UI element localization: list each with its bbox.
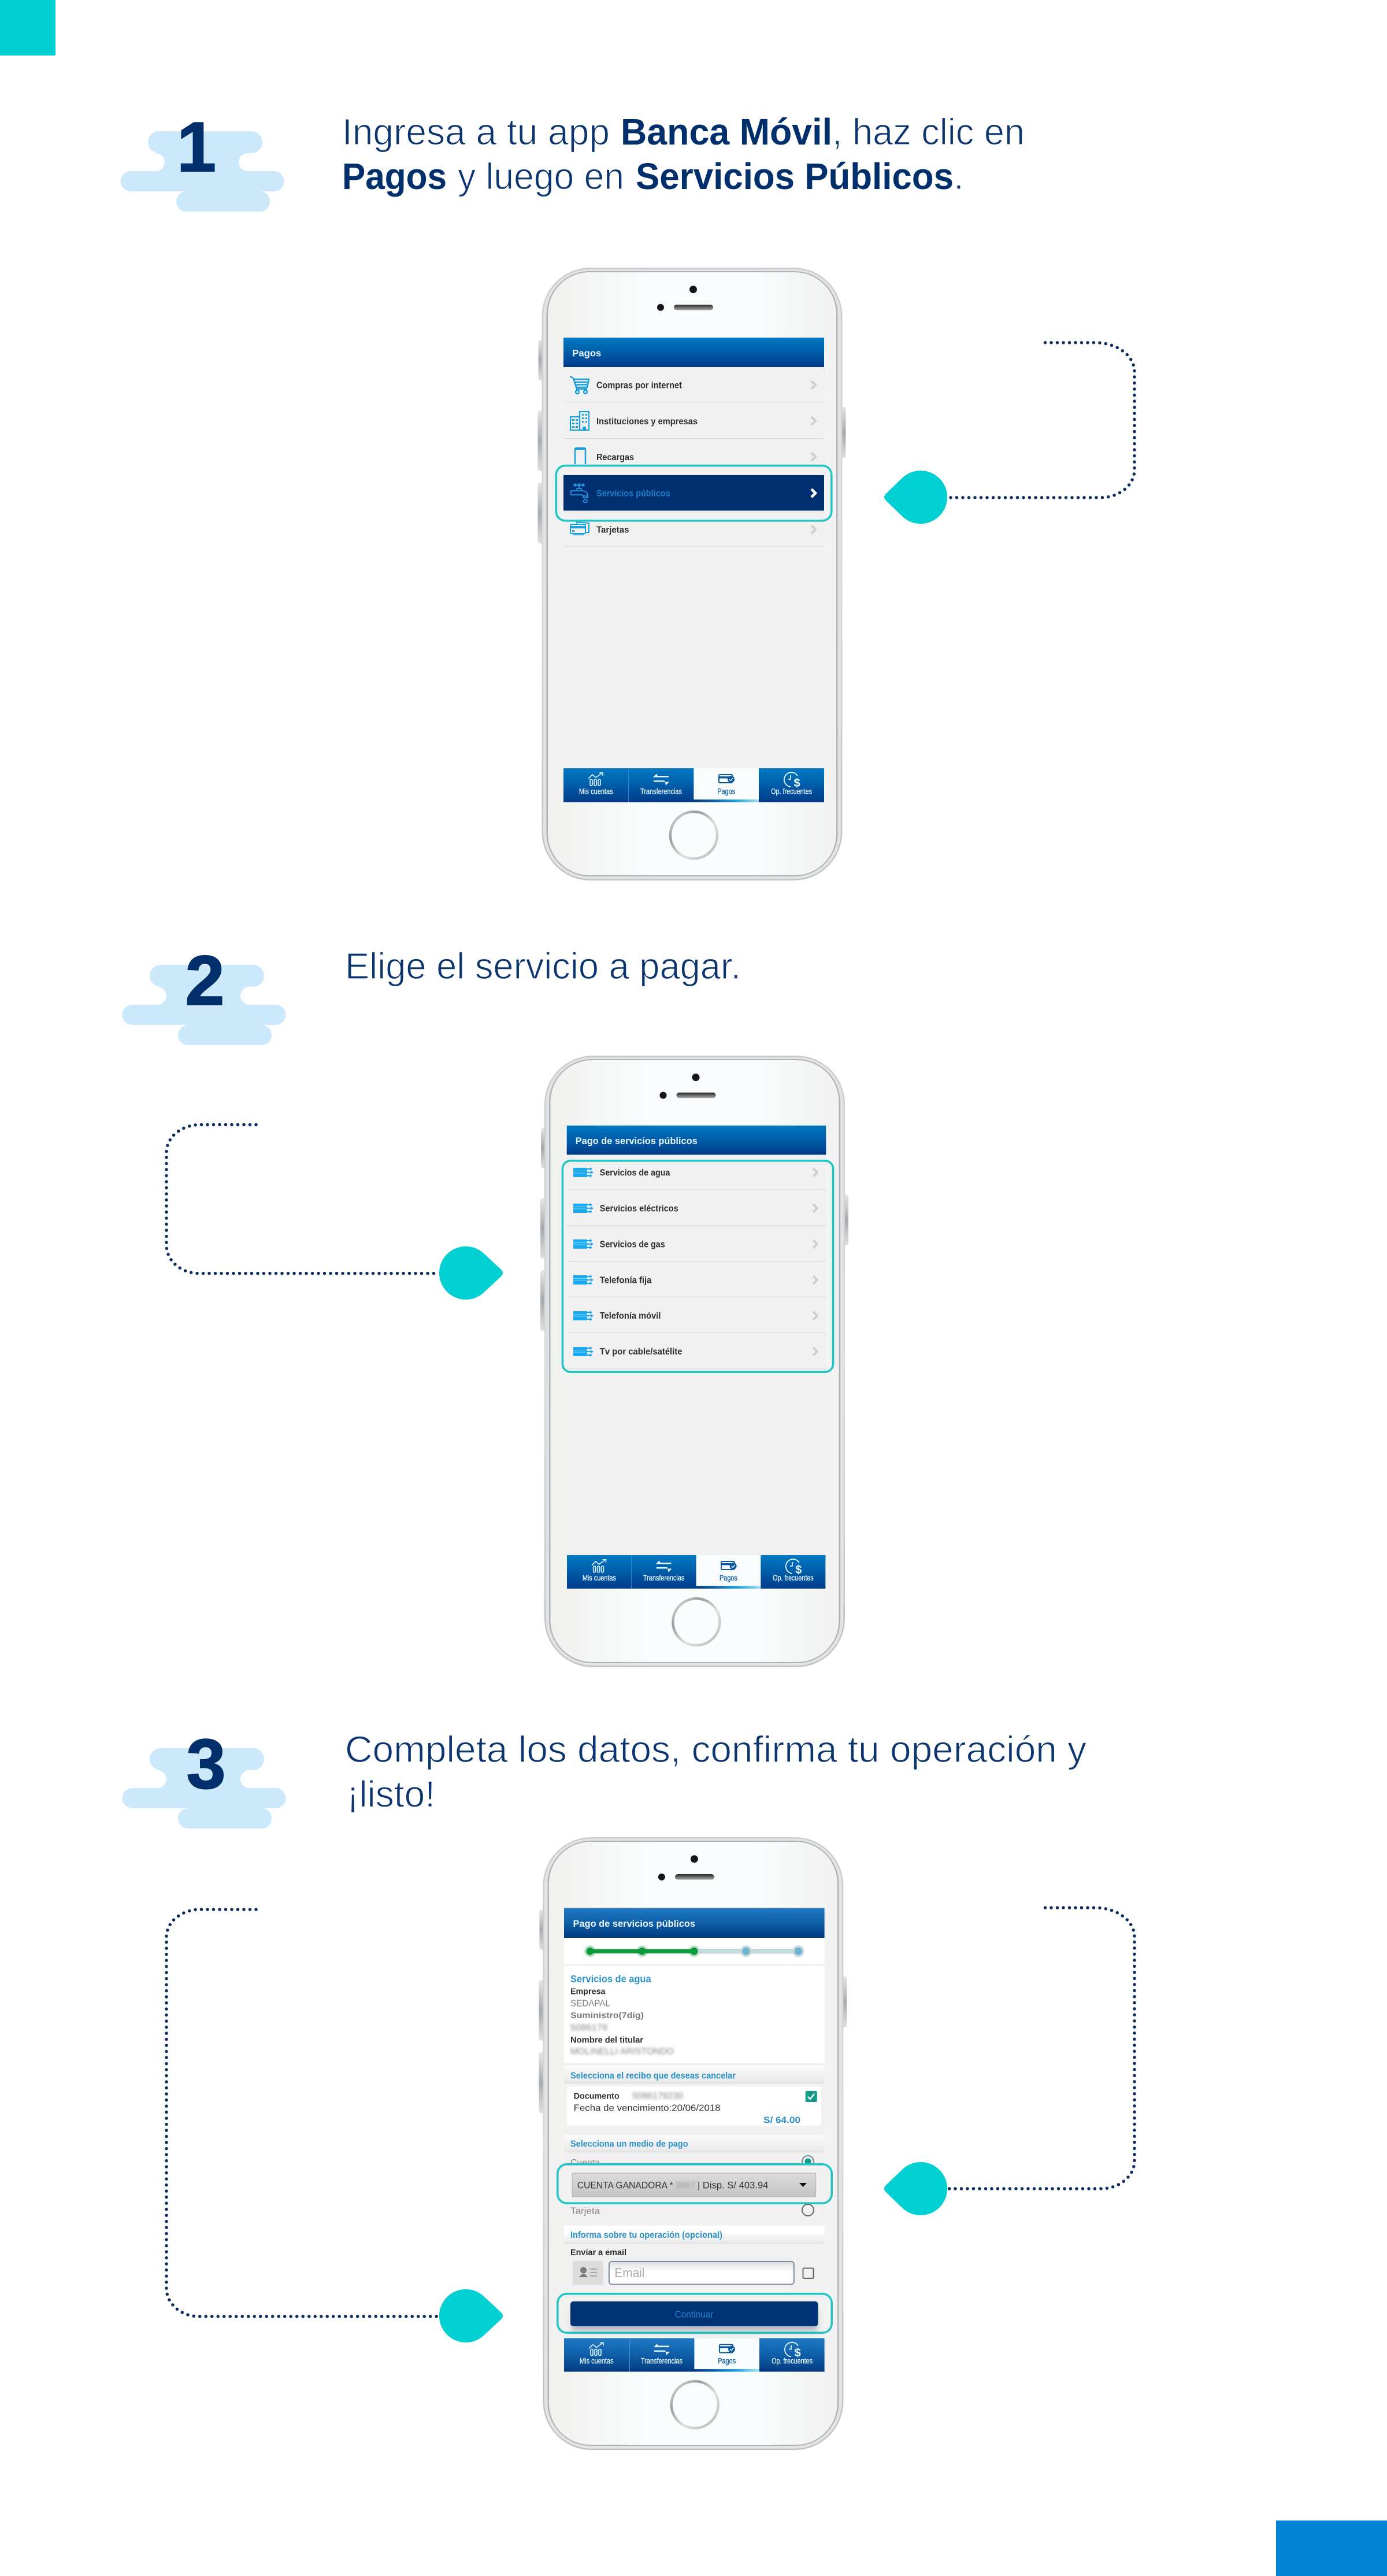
row: recargas <box>575 448 815 467</box>
bottom tab bar: Transferencias <box>640 787 682 795</box>
option: tarjeta: Tarjeta <box>570 2206 600 2216</box>
bottom tab bar: $ <box>795 1564 802 1576</box>
step 1 instruction text: Banca Móvil <box>621 111 832 153</box>
section: recibo: Selecciona el recibo que deseas cancelar <box>570 2071 736 2081</box>
bottom tab bar: Op. frecuentes <box>771 787 812 795</box>
section: informa <box>564 2226 825 2243</box>
account dropdown: | Disp. S/ 403.94 <box>698 2179 768 2191</box>
receipt card: 5086179230 <box>632 2092 683 2101</box>
service details: MOLINELLI ARISTONDO <box>570 2046 674 2057</box>
screen header <box>564 1908 825 1938</box>
receipt card: Fecha de vencimiento:20/06/2018 <box>574 2103 721 2114</box>
bottom tab bar: Mis cuentas <box>580 2357 614 2366</box>
screen header: Pago de servicios públicos <box>573 1918 695 1929</box>
cover between rows <box>563 464 824 521</box>
email field <box>570 2248 814 2285</box>
service details: Empresa <box>570 1986 606 1997</box>
row: compras por internet: Compras por internet <box>596 380 682 391</box>
row: servicios de agua <box>567 1167 826 1190</box>
service details: SEDAPAL <box>570 1999 610 2008</box>
row: recargas: Recargas <box>596 453 634 462</box>
step 3 instruction text <box>345 1729 1086 1815</box>
number badge 3 <box>123 1724 285 1829</box>
step 1 instruction text: , haz clic en <box>832 111 1025 153</box>
number badge 2: 2 <box>186 941 224 1020</box>
corner block: teal <box>0 0 55 55</box>
bottom tab bar: Transferencias <box>643 1574 685 1582</box>
row: servicios de agua: Servicios de agua <box>600 1168 670 1178</box>
row: telefonía móvil <box>567 1311 826 1333</box>
option: cuenta: Cuenta <box>570 2158 600 2168</box>
row: servicios públicos selected <box>563 475 824 511</box>
phone 2: service list <box>540 1056 848 1667</box>
row: tv por cable: Tv por cable/satélite <box>600 1347 683 1357</box>
step 1 instruction text <box>342 111 1025 197</box>
number badge 1 <box>120 108 284 212</box>
phone 3: payment form <box>539 1837 847 2450</box>
bottom tab bar: Mis cuentas <box>579 787 613 795</box>
step 1 instruction text: . <box>954 156 964 197</box>
email field: Enviar a email <box>570 2248 626 2257</box>
row: servicios de gas: Servicios de gas <box>600 1239 665 1250</box>
step 1 instruction text: y luego en <box>458 156 624 197</box>
continue button <box>570 2301 818 2331</box>
number badge 3: 3 <box>187 1724 225 1803</box>
step 3 instruction text: ¡listo! <box>347 1774 435 1815</box>
bottom tab bar: $ <box>794 2347 801 2360</box>
step 1 instruction text: Pagos <box>342 156 447 197</box>
service details: Nombre del titular <box>570 2035 643 2045</box>
bottom tab bar <box>564 2338 825 2372</box>
cover below cuenta <box>558 2164 830 2203</box>
receipt card <box>568 2086 821 2126</box>
row: telefonía fija: Telefonía fija <box>600 1275 652 1285</box>
connector with pin 3 left <box>166 1909 503 2342</box>
screen header: Pagos: Pagos <box>572 348 601 358</box>
bottom tab bar: Transferencias <box>641 2357 683 2366</box>
service details <box>564 1966 825 2063</box>
screen header: Pago de servicios públicos <box>576 1135 698 1146</box>
connector with pin 1 <box>884 343 1134 524</box>
service details: Servicios de agua <box>570 1973 651 1985</box>
row: servicios eléctricos: Servicios eléctricos <box>600 1204 678 1214</box>
screen header <box>567 1126 826 1155</box>
bottom tab bar: $ <box>793 777 800 790</box>
highlight outline: continue <box>558 2294 832 2333</box>
row: tv por cable <box>567 1346 826 1368</box>
connector with pin 2 <box>166 1124 503 1300</box>
number badge 2 <box>123 941 285 1045</box>
account dropdown: CUENTA GANADORA * <box>577 2179 673 2191</box>
row: compras por internet <box>563 376 824 402</box>
row: telefonía móvil: Telefonía móvil <box>600 1311 661 1321</box>
bottom tab bar: Op. frecuentes <box>772 2357 813 2366</box>
row: tarjetas: Tarjetas <box>596 525 629 535</box>
row: servicios de gas <box>567 1239 826 1261</box>
row: tarjetas <box>563 522 824 546</box>
bottom tab bar <box>567 1555 825 1589</box>
row: telefonía fija <box>567 1275 826 1297</box>
highlight outline <box>556 465 832 521</box>
bottom tab bar: Mis cuentas <box>583 1574 616 1582</box>
progress stepper <box>564 1938 825 1966</box>
continue button: Continuar <box>675 2309 714 2320</box>
section: medio de pago: Selecciona un medio de pago <box>570 2139 688 2149</box>
option: tarjeta <box>570 2204 814 2216</box>
option: cuenta <box>570 2156 814 2168</box>
screen header: Pagos <box>563 338 824 367</box>
number badge 1: 1 <box>177 108 216 186</box>
bottom tab bar: Pagos <box>720 1574 737 1582</box>
highlight outline <box>562 1161 833 1372</box>
service details: Suministro(7dig) <box>570 2011 644 2020</box>
email field: Email <box>614 2266 644 2280</box>
highlight outline: account <box>558 2164 832 2203</box>
account dropdown: 3867 <box>675 2179 696 2191</box>
receipt card: S/ 64.00 <box>763 2116 800 2125</box>
step 1 instruction text: Ingresa a tu app <box>342 111 610 153</box>
row: instituciones y empresas <box>563 412 824 439</box>
account dropdown <box>572 2173 816 2197</box>
step 2 <box>123 941 848 1667</box>
bottom tab bar: Pagos <box>718 2357 736 2366</box>
row: servicios eléctricos <box>567 1203 826 1226</box>
phone 1: pagos menu <box>537 268 846 880</box>
bottom tab bar: Pagos <box>717 787 735 795</box>
bottom tab bar <box>563 768 824 802</box>
receipt card: Documento <box>574 2092 620 2101</box>
row: servicios públicos selected: Servicios públicos <box>596 489 670 498</box>
corner block: blue <box>1276 2521 1387 2576</box>
screen background <box>564 1938 825 2338</box>
section: informa: Informa sobre tu operación (opcional) <box>570 2230 722 2240</box>
step 1 <box>120 108 1134 880</box>
service details: 5086179 <box>570 2023 607 2033</box>
step 3 instruction text: Completa los datos, confirma tu operación y <box>345 1729 1086 1770</box>
connector with pin 3 right <box>884 1908 1134 2215</box>
screen background <box>567 1154 826 1555</box>
section: recibo <box>564 2066 825 2083</box>
bottom tab bar: Op. frecuentes <box>773 1574 814 1582</box>
step 2 instruction text: Elige el servicio a pagar. <box>345 945 741 987</box>
section: medio de pago <box>564 2135 825 2152</box>
screen background <box>563 367 824 768</box>
row: instituciones y empresas: Instituciones y empresas <box>596 417 698 427</box>
step 3 <box>123 1724 1134 2450</box>
step 1 instruction text: Servicios Públicos <box>636 156 954 197</box>
